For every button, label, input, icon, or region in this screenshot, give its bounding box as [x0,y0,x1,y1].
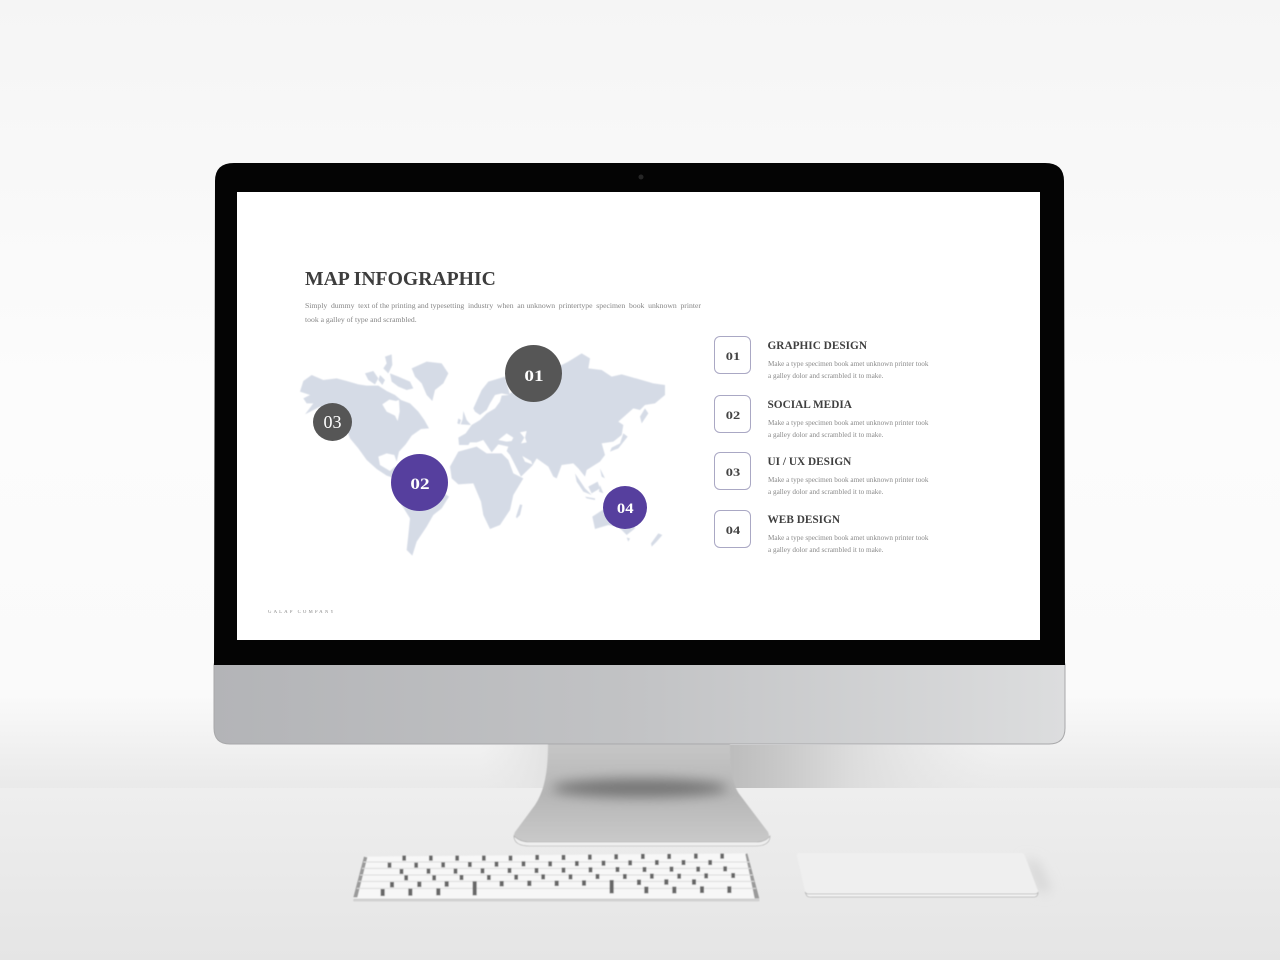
intro text: book [629,301,644,310]
intro text: printertype [559,301,593,310]
map marker 01: 01 [524,368,543,385]
list item 04: web design [714,510,928,554]
trackpad [797,853,1038,897]
intro text: took a galley of type and scrambled. [305,315,417,324]
list item 03: ui / ux design [714,452,928,496]
map marker 02: 02 [410,476,429,493]
keyboard [353,853,759,901]
description [768,476,928,496]
list item 01: graphic design [714,336,928,380]
intro text: when [497,301,514,310]
description: a galley dolor and scrambled it to make. [768,431,883,439]
trackpad shadow [1024,858,1052,892]
intro text: dummy [331,301,354,310]
map marker 01 [505,345,562,402]
number badge 04: 04 [725,523,740,537]
number badge 02: 02 [725,408,740,422]
description: Make a type specimen book amet unknown printer took [768,419,928,427]
number badge 03: 03 [725,465,740,479]
description [768,419,928,439]
number badge 01: 01 [725,349,740,363]
map marker 03 [313,403,352,441]
monitor bezel [214,163,1065,665]
australia [592,508,635,535]
hudson bay [382,400,400,421]
japan [610,433,628,452]
map marker 03: 03 [324,412,342,432]
number badge 04 [714,510,751,548]
description [768,534,928,554]
intro text: Simply [305,301,327,310]
arctic islands [365,354,413,390]
description: Make a type specimen book amet unknown printer took [768,534,928,542]
title: MAP INFOGRAPHIC [305,268,496,290]
map marker 04: 04 [617,501,633,517]
greenland [412,362,448,401]
monitor chin [214,664,1065,744]
description: a galley dolor and scrambled it to make. [768,488,883,496]
intro text: an unknown [517,301,555,310]
description: Make a type specimen book amet unknown printer took [768,360,928,368]
table surface [0,788,1280,960]
monitor stand [514,744,770,846]
intro text: unknown [648,301,677,310]
footer brand: GALAP COMPANY [268,610,336,615]
intro text [305,301,701,324]
scandinavia [473,377,510,415]
number badge 03 [714,452,751,490]
world map: eurasia, africa, oceania [450,353,665,547]
madagascar [516,504,522,518]
monitor shadow on wall, right of stand [728,745,1000,788]
eurasia [458,353,665,478]
description: a galley dolor and scrambled it to make. [768,546,883,554]
intro text: text of the printing and typesetting [358,301,464,310]
southeast asia islands [575,468,605,500]
map marker 04 [603,486,647,529]
intro text: printer [680,301,701,310]
number badge 01 [714,336,751,374]
black sea and caspian sea [498,431,527,443]
description: a galley dolor and scrambled it to make. [768,372,883,380]
webcam [638,174,644,180]
description: Make a type specimen book amet unknown printer took [768,476,928,484]
intro text: industry [468,301,493,310]
map marker 02 [391,454,448,511]
world map: americas [300,354,471,556]
heading: ui / ux design: UI / UX DESIGN [768,456,851,468]
heading: graphic design: GRAPHIC DESIGN [768,340,867,352]
south america [402,492,449,556]
number badge 02 [714,395,751,433]
sakhalin [640,408,648,423]
list item 02: social media [714,395,928,439]
north america [300,375,429,482]
persian gulf [522,456,532,464]
heading: social media: SOCIAL MEDIA [768,399,852,411]
monitor screen [237,192,1040,640]
africa [450,447,523,529]
heading: web design: WEB DESIGN [768,514,840,526]
monitor shadow on wall, left of stand [480,745,550,788]
description [768,360,928,380]
british isles [457,411,471,425]
intro text: specimen [596,301,625,310]
tasmania and new zealand [627,533,662,547]
